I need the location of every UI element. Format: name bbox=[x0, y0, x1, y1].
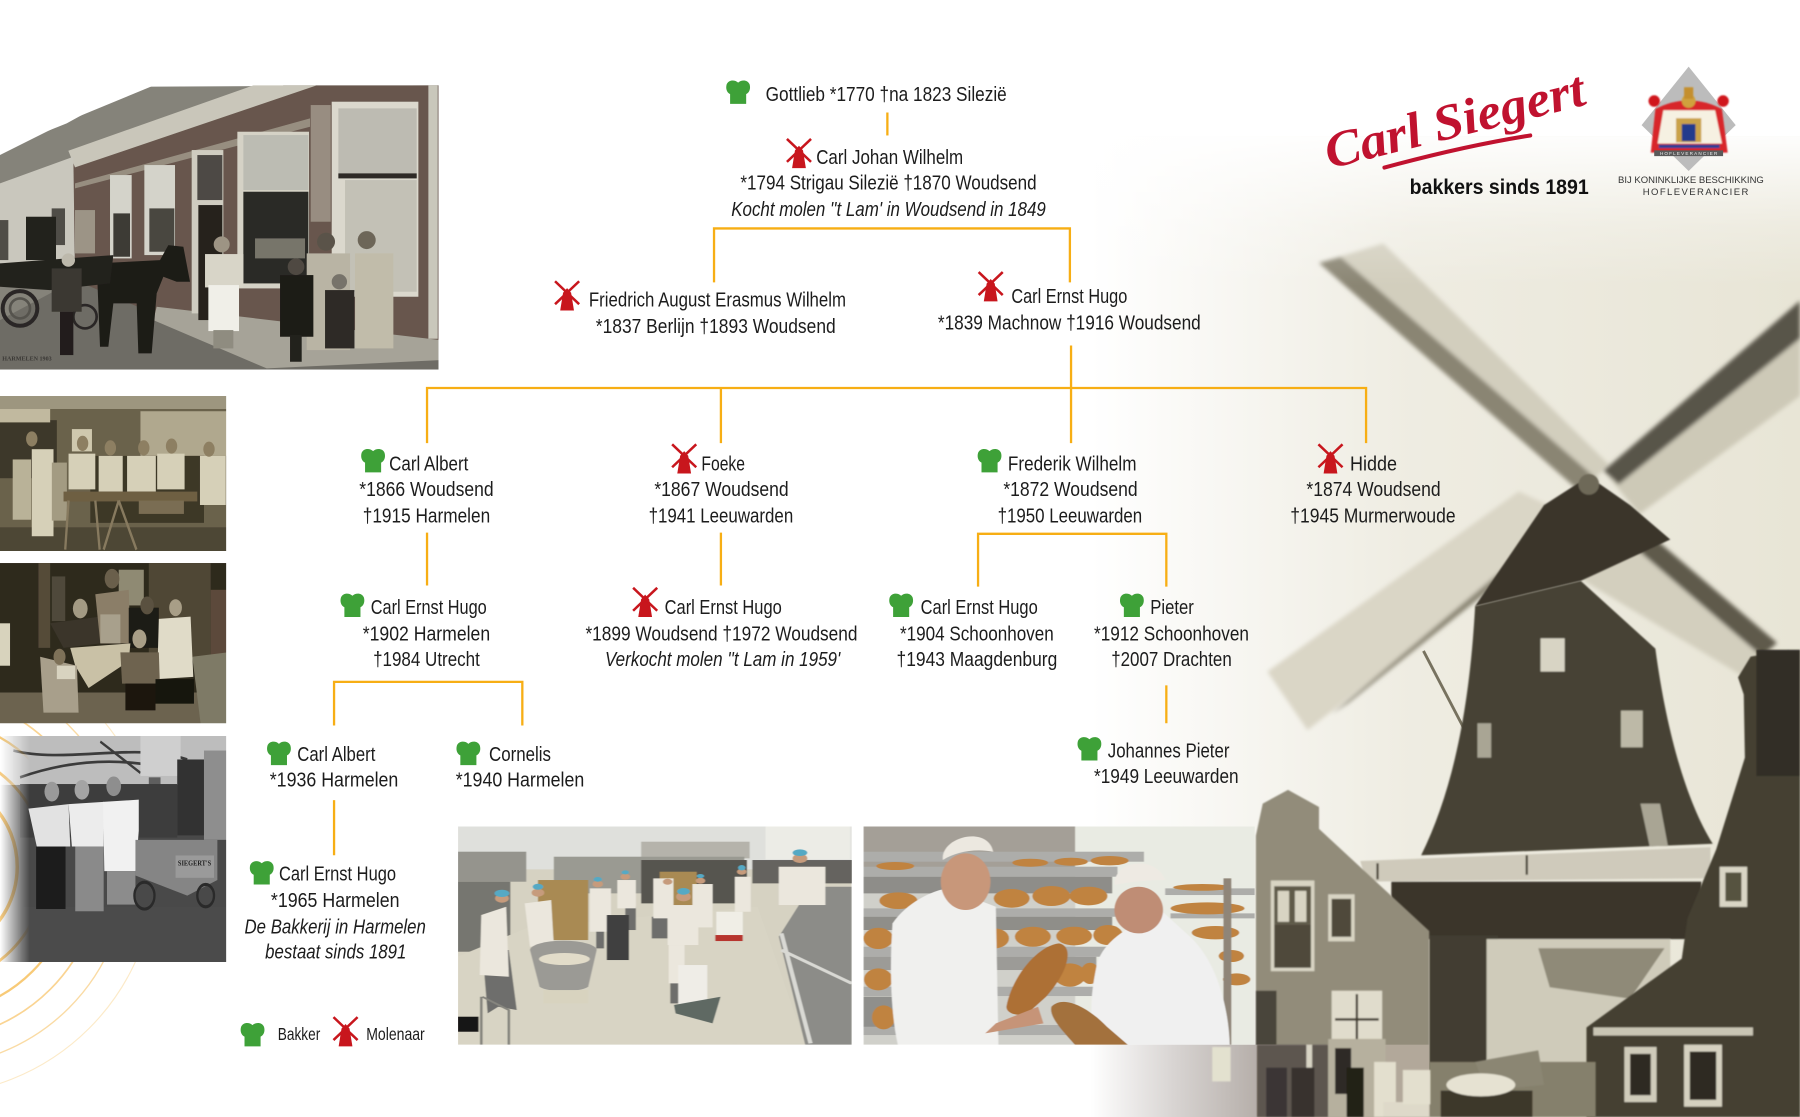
photo: shop front with horse and cart, Harmelen bbox=[0, 85, 440, 370]
sail: lower right bbox=[1583, 542, 1779, 674]
top fade bbox=[1187, 136, 1800, 272]
windmill base bbox=[1360, 847, 1710, 1073]
connector lines bbox=[334, 113, 1366, 855]
left house bbox=[1256, 790, 1429, 1117]
family member: Carl Albert 1936: *1936 Harmelen bbox=[270, 768, 398, 791]
icon: baker hat bbox=[726, 80, 750, 104]
windmill hub bbox=[1475, 474, 1670, 606]
legend: Molenaar bbox=[366, 1024, 425, 1044]
crest banner: HOFLEVERANCIER bbox=[1660, 151, 1718, 156]
sail: lower left bbox=[1267, 492, 1546, 730]
family member: Carl Ernst Hugo 1899: *1899 Woudsend †1972 Woudsend bbox=[585, 623, 858, 646]
icon: windmill bbox=[633, 588, 657, 617]
family member: Carl Johan Wilhelm bbox=[731, 139, 1046, 221]
family member: Pieter bbox=[1094, 594, 1249, 671]
icon: baker hat bbox=[978, 449, 1001, 472]
family member: Carl Albert 1936 bbox=[267, 742, 398, 791]
logo: Carl Siegert bbox=[1318, 60, 1592, 199]
icon: windmill bbox=[672, 444, 696, 474]
royal warrant crest bbox=[1618, 67, 1764, 198]
family member: Carl Ernst Hugo 1904: †1943 Maagdenburg bbox=[897, 648, 1057, 671]
family member: Friedrich August Erasmus Wilhelm: Friedrich August Erasmus Wilhelm bbox=[589, 289, 846, 312]
family member: Carl Albert 1936: Carl Albert bbox=[297, 743, 376, 766]
family member: Carl Albert 1866: †1915 Harmelen bbox=[363, 504, 490, 527]
family member: Frederik Wilhelm: †1950 Leeuwarden bbox=[998, 504, 1142, 527]
family member: Carl Ernst Hugo 1902: Carl Ernst Hugo bbox=[371, 596, 487, 619]
crest mantle bbox=[1648, 87, 1729, 153]
icon: baker hat bbox=[267, 742, 291, 765]
photo caption: HARMELEN 1903 bbox=[2, 355, 52, 362]
family member: Hidde bbox=[1290, 444, 1456, 527]
windmill tower bbox=[1421, 581, 1713, 855]
family member: Carl Ernst Hugo 1904 bbox=[889, 594, 1057, 671]
family member: Carl Albert 1866: Carl Albert bbox=[389, 453, 469, 476]
family member: Carl Ernst Hugo 1965: *1965 Harmelen bbox=[271, 889, 399, 912]
windmill strut bbox=[1423, 651, 1465, 730]
photo: family around a table bbox=[0, 563, 227, 724]
decorative orange rings bbox=[0, 638, 156, 1095]
family member: Cornelis bbox=[456, 742, 584, 791]
background photo: windmill bbox=[1175, 136, 1800, 1117]
icon: windmill bbox=[1318, 444, 1343, 474]
warrant caption: BIJ KONINKLIJKE BESCHIKKING bbox=[1618, 175, 1764, 186]
family member: Carl Ernst Hugo 1904: Carl Ernst Hugo bbox=[921, 596, 1038, 619]
family member: Pieter: †2007 Drachten bbox=[1111, 648, 1232, 671]
family member: Johannes Pieter bbox=[1078, 737, 1239, 788]
figures group bbox=[1212, 1039, 1430, 1117]
cart lettering: SIEGERT'S bbox=[178, 861, 211, 868]
family member: Carl Ernst Hugo 1965 bbox=[245, 861, 426, 964]
right house bbox=[1586, 650, 1800, 1117]
logo underline swoosh bbox=[1384, 135, 1530, 168]
family member: Cornelis: *1940 Harmelen bbox=[456, 768, 584, 791]
icon: baker hat bbox=[1120, 594, 1144, 617]
family member: Johannes Pieter: *1949 Leeuwarden bbox=[1094, 765, 1239, 788]
bottom photo strip with figures bbox=[1091, 1039, 1430, 1117]
icon: baker hat bbox=[361, 449, 385, 472]
family member: Foeke: *1867 Woudsend bbox=[654, 478, 789, 501]
family member: Friedrich August Erasmus Wilhelm: *1837 Berlijn †1893 Woudsend bbox=[596, 315, 836, 338]
icon: baker hat bbox=[1078, 737, 1101, 761]
icon: baker hat bbox=[456, 742, 480, 765]
sail: upper left bbox=[1319, 243, 1609, 491]
family member: Johannes Pieter: Johannes Pieter bbox=[1108, 740, 1230, 763]
sail: upper right bbox=[1604, 301, 1800, 514]
family member: Carl Ernst Hugo 1902 bbox=[341, 594, 490, 671]
family member: Carl Johan Wilhelm: Carl Johan Wilhelm bbox=[816, 146, 963, 169]
crest diamond bbox=[1642, 67, 1736, 171]
family member: Gottlieb: Gottlieb *1770 †na 1823 Silezië bbox=[766, 83, 1007, 106]
logo tagline: bakkers sinds 1891 bbox=[1410, 176, 1589, 199]
family member: Friedrich August Erasmus Wilhelm bbox=[555, 281, 846, 338]
legend: Bakker bbox=[278, 1024, 320, 1044]
family member: Carl Ernst Hugo 1899 bbox=[585, 588, 858, 671]
family member: Carl Ernst Hugo 1839: *1839 Machnow †1916 Woudsend bbox=[938, 311, 1201, 334]
warrant caption second line: HOFLEVERANCIER bbox=[1643, 187, 1748, 198]
family member: Pieter: Pieter bbox=[1150, 596, 1194, 619]
icon: baker hat bbox=[889, 594, 913, 617]
family member: Carl Ernst Hugo 1904: *1904 Schoonhoven bbox=[900, 623, 1054, 646]
logo script wordmark: Carl Siegert bbox=[1318, 60, 1592, 179]
family member: Carl Ernst Hugo 1839: Carl Ernst Hugo bbox=[1011, 285, 1127, 308]
family member: Frederik Wilhelm: *1872 Woudsend bbox=[1003, 478, 1138, 501]
fence and cart bbox=[1429, 1050, 1596, 1117]
family member: Hidde: †1945 Murmerwoude bbox=[1290, 504, 1456, 527]
icon: baker hat bbox=[341, 594, 364, 617]
family member: Foeke bbox=[649, 444, 793, 527]
family member: Carl Ernst Hugo 1899: Verkocht molen ''t Lam in 1959' bbox=[605, 648, 841, 671]
family member: Foeke: Foeke bbox=[701, 453, 745, 476]
family member: Pieter: *1912 Schoonhoven bbox=[1094, 623, 1249, 646]
photo: three bakers with delivery cart bbox=[0, 736, 227, 964]
family member: Carl Albert 1866: *1866 Woudsend bbox=[359, 478, 494, 501]
family member: Carl Ernst Hugo 1965: bestaat sinds 1891 bbox=[265, 941, 406, 964]
family member: Carl Ernst Hugo 1965: Carl Ernst Hugo bbox=[279, 863, 396, 886]
family member: Foeke: †1941 Leeuwarden bbox=[649, 504, 793, 527]
legend icon: miller bbox=[333, 1017, 358, 1046]
family member: Gottlieb bbox=[726, 80, 1007, 106]
legend icon: baker bbox=[241, 1023, 264, 1046]
family member: Carl Ernst Hugo 1965: De Bakkerij in Harmelen bbox=[245, 915, 426, 938]
photo: bakers at workbench bbox=[0, 396, 227, 552]
family member: Carl Ernst Hugo 1902: †1984 Utrecht bbox=[373, 648, 480, 671]
icon: windmill bbox=[555, 281, 579, 311]
photo: modern bakery floor with team bbox=[457, 826, 853, 1046]
icon: baker hat bbox=[250, 861, 274, 885]
icon: windmill bbox=[979, 272, 1003, 301]
family member: Carl Ernst Hugo 1902: *1902 Harmelen bbox=[363, 623, 490, 646]
family member: Frederik Wilhelm bbox=[978, 449, 1142, 527]
family member: Hidde: Hidde bbox=[1350, 453, 1397, 476]
family member: Carl Ernst Hugo 1899: Carl Ernst Hugo bbox=[665, 596, 782, 619]
family member: Cornelis: Cornelis bbox=[489, 743, 551, 766]
family member: Carl Johan Wilhelm: *1794 Strigau Silezië †1870 Woudsend bbox=[740, 171, 1037, 194]
family member: Frederik Wilhelm: Frederik Wilhelm bbox=[1008, 453, 1136, 476]
family member: Hidde: *1874 Woudsend bbox=[1306, 478, 1441, 501]
family member: Carl Ernst Hugo 1839 bbox=[938, 272, 1201, 334]
family member: Carl Johan Wilhelm: Kocht molen ''t Lam' in Woudsend in 1849 bbox=[731, 198, 1046, 221]
family member: Carl Albert 1866 bbox=[359, 449, 494, 527]
legend bbox=[241, 1017, 425, 1046]
photo: two bakers holding bread bbox=[863, 826, 1258, 1046]
icon: windmill bbox=[787, 139, 811, 168]
